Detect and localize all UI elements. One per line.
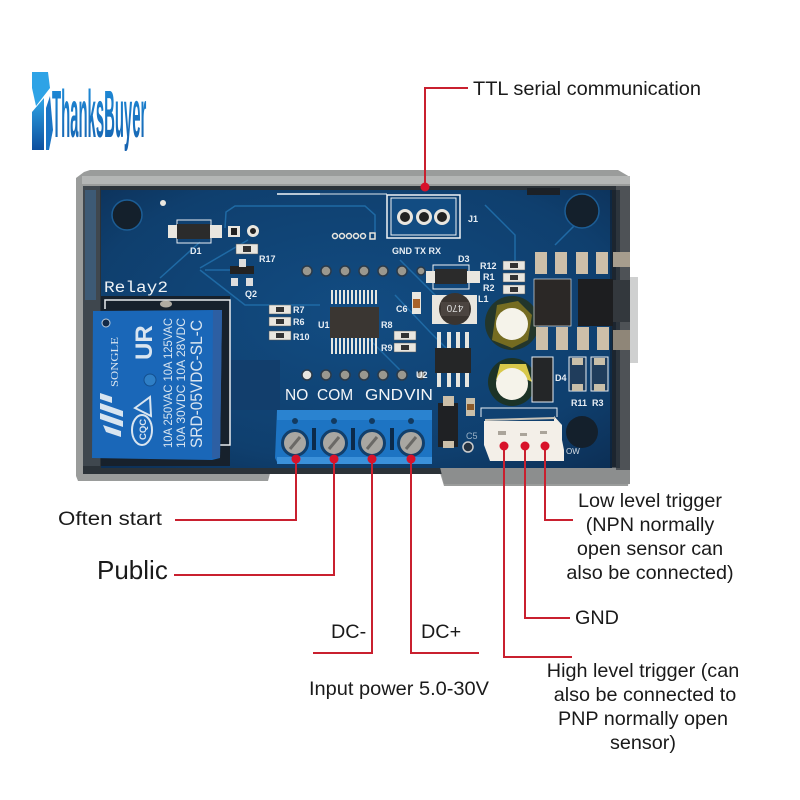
D4 and resistors R11 R3: D4: [555, 373, 567, 383]
U1 chip: U1: [318, 320, 330, 330]
label: High level trigger: High level trigger (can: [547, 660, 739, 682]
relay: SRD-05VDC-SL-C: CQC: [138, 419, 149, 440]
U2 chip: [416, 332, 471, 387]
J1 TTL connector: [387, 195, 478, 256]
label: High level trigger: PNP normally open: [558, 708, 728, 730]
MOSFETs and pads: [534, 252, 630, 350]
resistor group left: R7: [293, 305, 305, 315]
label: Public: Public: [97, 555, 168, 585]
C6 and L1 inductor: 470: [446, 302, 463, 313]
terminal labels: NO: [285, 387, 308, 404]
D1 diode: [168, 220, 259, 256]
U2 chip: U2: [416, 370, 428, 380]
label: TTL serial communication: TTL serial communication: [473, 78, 701, 100]
callout lines and dots: [174, 88, 573, 657]
label: High level trigger: also be connected to: [554, 684, 736, 706]
label: Input power: Input power 5.0-30V: [309, 678, 490, 700]
sensor connector: OW: [566, 447, 580, 456]
resistor group left: R6: [293, 317, 305, 327]
relay: SRD-05VDC-SL-C: SRD-05VDC-SL-C: [187, 320, 206, 448]
terminal labels: GND: [365, 387, 403, 404]
capacitors: [485, 296, 539, 406]
terminal labels: [285, 387, 433, 404]
D3, resistors R12 R1 R2: R12: [480, 261, 497, 271]
mounting holes: [112, 200, 142, 230]
R17 and Q2: [230, 244, 276, 299]
label: Low level trigger: (NPN normally: [586, 514, 714, 536]
relay silk label: Relay2: [104, 279, 168, 297]
D2 and C5: C5: [466, 431, 478, 441]
label: GND: GND: [575, 607, 619, 629]
label: Low level trigger: open sensor can: [577, 538, 723, 560]
resistor group left: [269, 305, 310, 342]
relay silk label: [104, 279, 230, 445]
terminal labels: VIN: [404, 387, 433, 404]
resistor group left: R10: [293, 332, 310, 342]
relay: SRD-05VDC-SL-C: 10A 250VAC 10A 125VAC: [161, 318, 175, 448]
terminal block: [275, 410, 432, 464]
display pins: [302, 266, 425, 380]
D3, resistors R12 R1 R2: R1: [483, 272, 495, 282]
R17 and Q2: R17: [259, 254, 276, 264]
D4 and resistors R11 R3: [532, 357, 608, 408]
relay: SRD-05VDC-SL-C: 10A 30VDC 10A 28VDC: [174, 318, 188, 448]
case: [76, 170, 630, 486]
D3, resistors R12 R1 R2: R2: [483, 283, 495, 293]
pcb: [101, 190, 612, 468]
header pads: [332, 233, 375, 239]
C6 and L1 inductor: [396, 292, 489, 325]
logo: ThanksBuyer: ThanksBuyer: [52, 78, 146, 152]
U1 chip: [318, 290, 379, 354]
D2 and C5: [438, 396, 478, 452]
J1 TTL connector: J1: [468, 214, 478, 224]
sensor connector: [481, 408, 580, 461]
J1 TTL connector: GND TX RX: [392, 246, 441, 256]
R17 and Q2: Q2: [245, 289, 257, 299]
C6 and L1 inductor: C6: [396, 304, 408, 314]
product photo: controller board in case: [76, 170, 638, 486]
label: Often start: Often start: [58, 508, 163, 530]
label: DC+: DC+: [421, 621, 461, 643]
label: Low level trigger: also be connected): [566, 562, 734, 584]
terminal labels: COM: [317, 387, 353, 404]
label: High level trigger: sensor): [610, 732, 676, 754]
D4 and resistors R11 R3: R11: [571, 398, 587, 408]
label: Low level trigger: Low level trigger: [578, 490, 722, 512]
C6 and L1 inductor: L1: [478, 294, 489, 304]
relay: SRD-05VDC-SL-C: [92, 310, 222, 460]
relay: SRD-05VDC-SL-C: UR: [131, 325, 158, 360]
D3, resistors R12 R1 R2: [426, 254, 525, 294]
D1 diode: D1: [190, 246, 202, 256]
traces: [160, 205, 575, 372]
label: DC-: DC-: [331, 621, 366, 643]
resistor group R8 R9: R9: [381, 343, 393, 353]
D4 and resistors R11 R3: R3: [592, 398, 604, 408]
resistor group R8 R9: R8: [381, 320, 393, 330]
relay: SRD-05VDC-SL-C: SONGLE: [109, 337, 121, 387]
resistor group R8 R9: [381, 320, 416, 353]
D3, resistors R12 R1 R2: D3: [458, 254, 470, 264]
